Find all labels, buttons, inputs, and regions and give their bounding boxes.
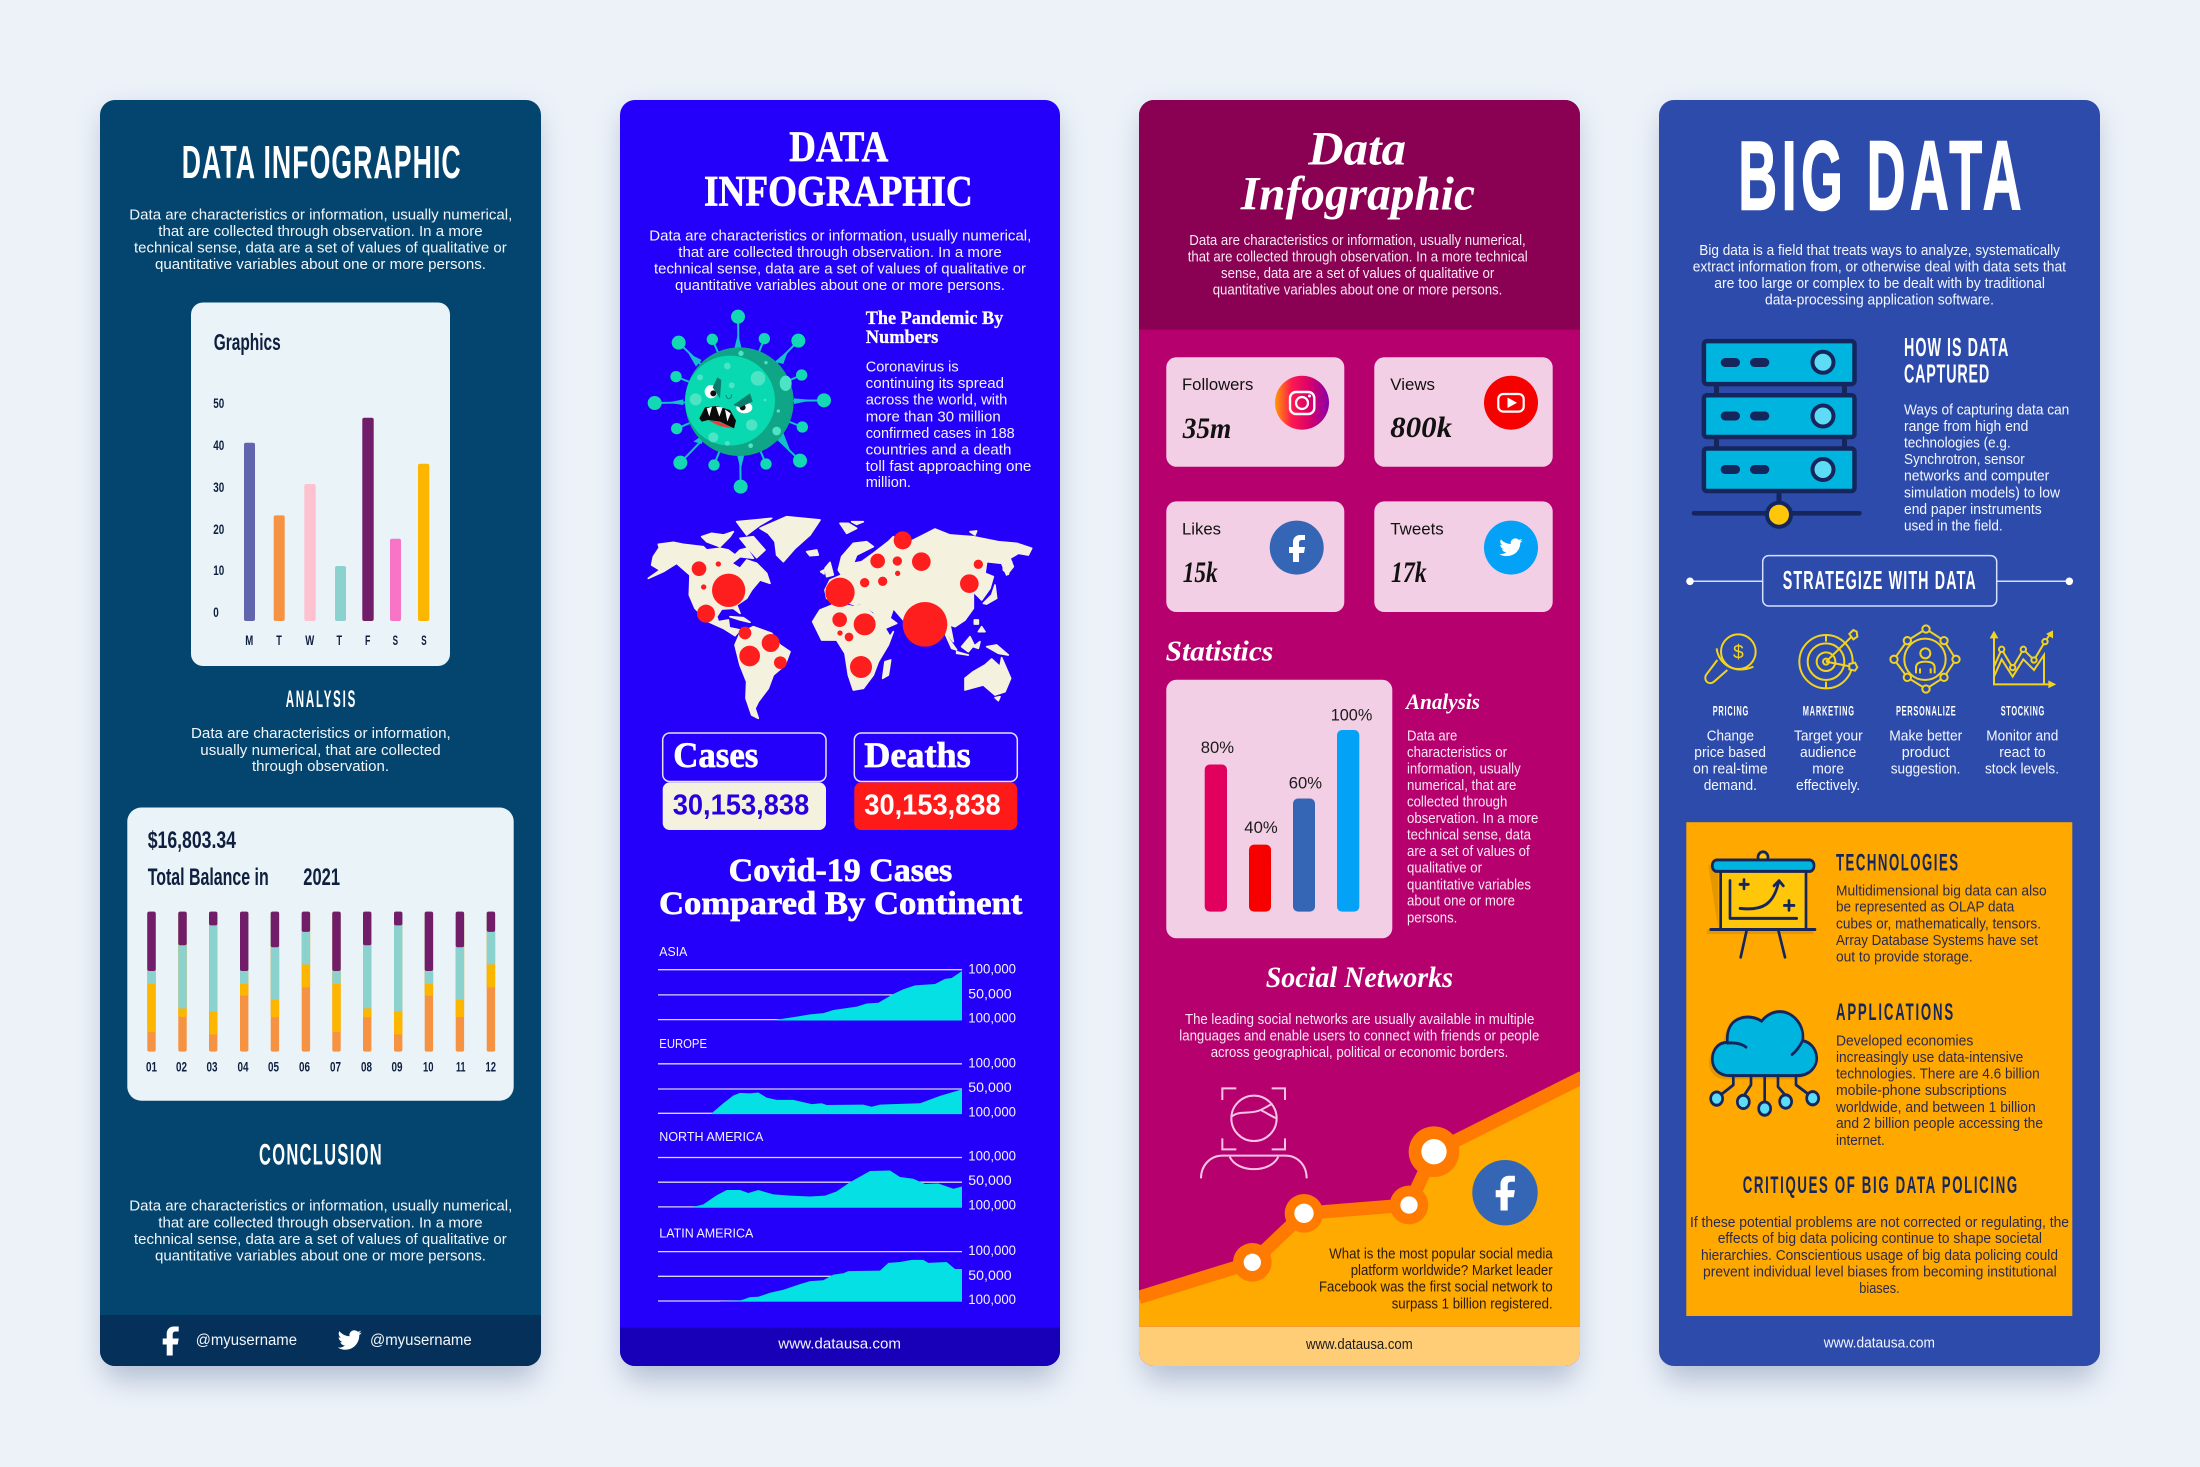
column: pricing text: PRICING bbox=[1713, 704, 1748, 719]
analysis text: characteristics or bbox=[1407, 745, 1507, 761]
callout text bbox=[1319, 1246, 1554, 1312]
column: pricing text: price based bbox=[1694, 745, 1766, 761]
card: total balance stacked bars: 09 bbox=[392, 1059, 403, 1075]
intro text: that are collected through observation. In a more bbox=[678, 244, 1002, 261]
callout text: surpass 1 billion registered. bbox=[1392, 1296, 1553, 1312]
social networks text: The leading social networks are usually available in multiple bbox=[1185, 1012, 1534, 1028]
footer bar bbox=[1139, 1327, 1580, 1366]
technologies text: out to provide storage. bbox=[1836, 949, 1973, 966]
icon: cloud network bbox=[1709, 1012, 1819, 1115]
card: graphics bar chart: S bbox=[393, 633, 398, 648]
card: views bbox=[1374, 357, 1553, 467]
conclusion text: technical sense, data are a set of values of qualitative or bbox=[134, 1231, 507, 1248]
card: tweets: 17k bbox=[1391, 556, 1427, 589]
card: graphics bar chart: Graphics bbox=[214, 329, 281, 355]
social networks text bbox=[1179, 1012, 1539, 1061]
card: percentage bar chart: 40% bbox=[1244, 818, 1278, 837]
conclusion text: quantitative variables about one or more persons. bbox=[155, 1248, 486, 1265]
analysis text: numerical, that are bbox=[1407, 778, 1516, 794]
analysis text: Data are characteristics or information, bbox=[191, 725, 451, 742]
intro text: Big data is a field that treats ways to analyze, systematically bbox=[1699, 243, 2061, 259]
card: total balance stacked bars: 11 bbox=[456, 1059, 466, 1075]
applications text: increasingly use data-intensive bbox=[1836, 1049, 2023, 1066]
pandemic text: continuing its spread bbox=[866, 375, 1004, 392]
icon: pricing bbox=[1705, 634, 1756, 683]
line chart with yellow area bbox=[1139, 1077, 1582, 1327]
card: percentage bar chart: 100% bbox=[1331, 705, 1372, 724]
card: total balance stacked bars: $16,803.34 bbox=[148, 827, 236, 854]
pandemic text: countries and a death bbox=[866, 442, 1011, 459]
area chart: continents: 100,000 bbox=[968, 1291, 1016, 1307]
card: followers: 35m bbox=[1182, 412, 1231, 445]
title: INFOGRAPHIC bbox=[704, 168, 973, 216]
column: marketing text: MARKETING bbox=[1803, 704, 1854, 719]
heading: how is data captured: CAPTURED bbox=[1904, 360, 1989, 389]
area chart: continents: NORTH AMERICA bbox=[659, 1129, 764, 1144]
critiques text: effects of big data policing continue to shape societal bbox=[1718, 1230, 2042, 1247]
area chart: continents: 100,000 bbox=[968, 1103, 1016, 1119]
card: graphics bar chart: F bbox=[365, 633, 370, 648]
heading: covid-19 cases compared by continent: Covid-19 Cases bbox=[729, 853, 952, 889]
technologies text: be represented as OLAP data bbox=[1836, 899, 2015, 916]
card: likes: 15k bbox=[1183, 556, 1218, 589]
card: likes: Likes bbox=[1182, 520, 1221, 538]
critiques text: biases. bbox=[1859, 1280, 1900, 1297]
intro text: that are collected through observation. In a more technical bbox=[1188, 249, 1528, 265]
applications text: internet. bbox=[1836, 1132, 1885, 1149]
applications text: mobile-phone subscriptions bbox=[1836, 1082, 2007, 1099]
analysis text bbox=[191, 725, 451, 775]
card: total balance stacked bars bbox=[127, 808, 514, 1101]
banner: strategize with data bbox=[1686, 556, 2073, 606]
area chart: continents: 100,000 bbox=[968, 1196, 1016, 1212]
area chart: continents bbox=[658, 944, 1016, 1307]
captured text bbox=[1904, 403, 2069, 534]
icon: personalize network bbox=[1890, 625, 1960, 693]
panel: big data blue bbox=[1659, 100, 2100, 1366]
analysis text: technical sense, data bbox=[1407, 828, 1532, 844]
footer bar: usernames bbox=[100, 1315, 541, 1366]
technologies text: Multidimensional big data can also bbox=[1836, 882, 2047, 899]
intro text: Data are characteristics or information, usually numerical, bbox=[129, 206, 512, 224]
stat: cases: Cases bbox=[673, 735, 758, 775]
applications text: technologies. There are 4.6 billion bbox=[1836, 1066, 2040, 1083]
intro text: extract information from, or otherwise deal with data sets that bbox=[1693, 259, 2066, 275]
technologies text: Array Database Systems have set bbox=[1836, 932, 2039, 949]
captured text: networks and computer bbox=[1904, 469, 2049, 485]
icon: pricing: $ bbox=[1733, 643, 1744, 664]
intro text: quantitative variables about one or more persons. bbox=[155, 256, 486, 273]
area chart: continents: 100,000 bbox=[968, 1148, 1016, 1164]
captured text: range from high end bbox=[1904, 419, 2028, 435]
intro text: are too large or complex to be dealt with by traditional bbox=[1714, 276, 2045, 292]
card: total balance stacked bars: 04 bbox=[238, 1059, 249, 1075]
card: total balance stacked bars: 06 bbox=[299, 1059, 310, 1075]
captured text: technologies (e.g. bbox=[1904, 436, 2011, 452]
column: personalize text: PERSONALIZE bbox=[1896, 704, 1956, 719]
area chart: continents: EUROPE bbox=[659, 1036, 707, 1051]
card: views: 800k bbox=[1390, 411, 1452, 444]
card: tweets: Tweets bbox=[1390, 520, 1444, 538]
heading: technologies: TECHNOLOGIES bbox=[1836, 849, 1958, 876]
column: marketing text: Target your bbox=[1794, 729, 1863, 745]
conclusion text bbox=[129, 1198, 512, 1265]
area chart: continents: 50,000 bbox=[968, 1172, 1012, 1188]
card: total balance stacked bars: 2021 bbox=[303, 864, 340, 891]
intro text: Data are characteristics or information, usually numerical, bbox=[1189, 233, 1526, 249]
card: graphics bar chart bbox=[191, 302, 450, 666]
icon: presentation board bbox=[1707, 852, 1815, 957]
card: graphics bar chart: 20 bbox=[213, 522, 224, 537]
stat: deaths bbox=[854, 733, 1017, 830]
analysis text: Data are bbox=[1407, 728, 1457, 744]
intro text bbox=[1188, 233, 1528, 298]
intro text: quantitative variables about one or more persons. bbox=[1213, 282, 1502, 298]
pandemic text: more than 30 million bbox=[866, 408, 1001, 425]
title bbox=[1240, 123, 1475, 221]
column: stocking text: STOCKING bbox=[2001, 704, 2044, 719]
stat: deaths: 30,153,838 bbox=[864, 790, 1001, 822]
conclusion text: that are collected through observation. In a more bbox=[158, 1214, 483, 1231]
heading: the pandemic by numbers: The Pandemic By bbox=[866, 308, 1004, 329]
intro text: data-processing application software. bbox=[1765, 292, 1994, 308]
column: personalize text bbox=[1889, 704, 1962, 778]
card: views: Views bbox=[1390, 375, 1435, 394]
icon: stocking chart bbox=[1991, 632, 2054, 687]
analysis text: quantitative variables bbox=[1407, 877, 1531, 893]
icon: facebook bbox=[1472, 1160, 1538, 1225]
social networks text: languages and enable users to connect with friends or people bbox=[1179, 1029, 1539, 1045]
card: followers: Followers bbox=[1182, 375, 1253, 394]
intro text: quantitative variables about one or more persons. bbox=[675, 277, 1005, 294]
footer bar: www.datausa.com bbox=[1305, 1337, 1413, 1353]
analysis text: usually numerical, that are collected bbox=[200, 742, 441, 759]
captured text: Synchrotron, sensor bbox=[1904, 452, 2025, 468]
card: total balance stacked bars: 05 bbox=[268, 1059, 279, 1075]
pandemic text: toll fast approaching one bbox=[866, 458, 1031, 475]
intro text: technical sense, data are a set of values of qualitative or bbox=[134, 240, 507, 256]
footer bar: usernames: @myusername bbox=[370, 1332, 472, 1349]
applications text: worldwide, and between 1 billion bbox=[1835, 1099, 2036, 1116]
captured text: Ways of capturing data can bbox=[1904, 403, 2069, 419]
heading: statistics: Statistics bbox=[1166, 637, 1273, 668]
captured text: end paper instruments bbox=[1904, 502, 2042, 518]
column: marketing text: audience bbox=[1800, 745, 1856, 761]
footer bar bbox=[620, 1328, 1060, 1366]
critiques text: prevent individual level biases from becoming institutional bbox=[1703, 1264, 2057, 1280]
title: Infographic bbox=[1240, 168, 1475, 221]
pandemic text: across the world, with bbox=[866, 392, 1007, 409]
area chart: continents: 100,000 bbox=[968, 1242, 1016, 1258]
critiques text: If these potential problems are not corrected or regulating, the bbox=[1690, 1214, 2069, 1231]
heading: critiques of big data policing: CRITIQUES OF BIG DATA POLICING bbox=[1743, 1172, 2017, 1199]
heading: analysis: Analysis bbox=[1404, 689, 1480, 714]
card: total balance stacked bars: 01 bbox=[146, 1059, 157, 1075]
analysis text: through observation. bbox=[252, 758, 389, 775]
area chart: continents: LATIN AMERICA bbox=[659, 1225, 754, 1240]
title: DATA INFOGRAPHIC bbox=[182, 136, 461, 188]
card: total balance stacked bars: 10 bbox=[423, 1059, 434, 1075]
orange box bbox=[1686, 822, 2072, 1316]
area chart: continents: 50,000 bbox=[968, 1267, 1012, 1283]
header band bbox=[1139, 100, 1580, 330]
heading: conclusion: CONCLUSION bbox=[259, 1139, 382, 1172]
area chart: continents: ASIA bbox=[659, 944, 688, 959]
analysis text: are a set of values of bbox=[1407, 844, 1531, 860]
intro text: technical sense, data are a set of values of qualitative or bbox=[654, 260, 1026, 278]
analysis text: information, usually bbox=[1407, 761, 1521, 777]
title: BIG DATA bbox=[1738, 120, 2022, 230]
card: total balance stacked bars: 07 bbox=[330, 1059, 341, 1075]
technologies text bbox=[1836, 882, 2047, 966]
panel: social magenta bbox=[1139, 100, 1582, 1366]
column: stocking text: react to bbox=[1999, 745, 2046, 761]
card: total balance stacked bars: 12 bbox=[486, 1059, 496, 1075]
heading: the pandemic by numbers: Numbers bbox=[866, 327, 938, 348]
banner: strategize with data: STRATEGIZE WITH DATA bbox=[1783, 567, 1976, 595]
card: graphics bar chart: W bbox=[305, 633, 314, 648]
analysis text: collected through bbox=[1407, 794, 1507, 810]
card: followers bbox=[1166, 357, 1344, 467]
heading: applications: APPLICATIONS bbox=[1836, 999, 1953, 1026]
column: pricing text bbox=[1693, 704, 1768, 794]
card: tweets bbox=[1374, 501, 1553, 612]
stat: cases bbox=[663, 733, 826, 830]
heading: covid-19 cases compared by continent bbox=[659, 853, 1022, 922]
card: graphics bar chart: 50 bbox=[213, 396, 224, 411]
heading: social networks: Social Networks bbox=[1266, 961, 1453, 994]
card: graphics bar chart: 30 bbox=[213, 480, 224, 495]
column: marketing text: effectively. bbox=[1796, 778, 1860, 794]
card: graphics bar chart: S bbox=[421, 633, 427, 648]
social networks text: across geographical, political or economic borders. bbox=[1211, 1045, 1508, 1061]
world map with case bubbles bbox=[648, 517, 1032, 718]
column: personalize text: product bbox=[1902, 745, 1950, 761]
column: pricing text: Change bbox=[1707, 729, 1754, 745]
applications text bbox=[1835, 1033, 2043, 1149]
icon: server stack bbox=[1692, 341, 1862, 527]
area chart: continents: 100,000 bbox=[968, 961, 1016, 977]
card: likes bbox=[1166, 501, 1344, 612]
icon: angry virus bbox=[648, 310, 831, 494]
column: marketing text bbox=[1794, 704, 1863, 794]
intro text bbox=[129, 206, 512, 273]
title: Data bbox=[1307, 123, 1406, 176]
card: percentage bar chart bbox=[1166, 680, 1392, 938]
heading: analysis: ANALYSIS bbox=[286, 685, 355, 712]
card: graphics bar chart: 10 bbox=[213, 563, 224, 578]
applications text: and 2 billion people accessing the bbox=[1836, 1115, 2043, 1132]
area chart: continents: 50,000 bbox=[968, 985, 1012, 1001]
card: graphics bar chart: M bbox=[245, 633, 253, 648]
captured text: simulation models) to low bbox=[1904, 485, 2060, 501]
card: graphics bar chart: T bbox=[336, 633, 343, 648]
column: personalize text: Make better bbox=[1889, 729, 1962, 745]
analysis text: persons. bbox=[1407, 910, 1457, 926]
pandemic text: million. bbox=[866, 474, 911, 491]
area chart: continents: 100,000 bbox=[968, 1054, 1016, 1070]
callout text: platform worldwide? Market leader bbox=[1351, 1263, 1553, 1279]
column: pricing text: on real-time bbox=[1693, 762, 1768, 778]
footer url: www.datausa.com bbox=[1823, 1336, 1935, 1352]
column: stocking text bbox=[1985, 704, 2059, 778]
column: personalize text: suggestion. bbox=[1891, 762, 1960, 778]
column: stocking text: stock levels. bbox=[1985, 762, 2059, 778]
card: graphics bar chart: 0 bbox=[213, 605, 219, 620]
critiques text: hierarchies. Conscientious usage of big data policing could bbox=[1701, 1247, 2058, 1264]
column: pricing text: demand. bbox=[1704, 778, 1757, 794]
card: total balance stacked bars: 08 bbox=[361, 1059, 372, 1075]
pandemic text bbox=[866, 358, 1031, 491]
footer bar: usernames: @myusername bbox=[196, 1332, 297, 1349]
heading: the pandemic by numbers bbox=[866, 308, 1004, 348]
heading: covid-19 cases compared by continent: Compared By Continent bbox=[659, 886, 1022, 922]
card: percentage bar chart: 60% bbox=[1289, 774, 1322, 793]
panel: data infographic teal bbox=[100, 100, 541, 1366]
column: stocking text: Monitor and bbox=[1986, 729, 2058, 745]
analysis text: observation. In a more bbox=[1407, 811, 1538, 827]
title: DATA bbox=[789, 124, 888, 171]
intro text: that are collected through observation. In a more bbox=[158, 223, 483, 240]
critiques text bbox=[1690, 1214, 2069, 1297]
captured text: used in the field. bbox=[1904, 518, 2003, 534]
card: total balance stacked bars: 03 bbox=[206, 1059, 218, 1075]
icon: person face scan bbox=[1201, 1088, 1307, 1178]
card: total balance stacked bars: Total Balance in bbox=[148, 864, 269, 891]
stat: deaths: Deaths bbox=[864, 735, 971, 775]
intro text bbox=[1693, 243, 2066, 308]
conclusion text: Data are characteristics or information, usually numerical, bbox=[129, 1198, 512, 1214]
intro text bbox=[649, 227, 1031, 294]
panel: covid blue bbox=[620, 100, 1060, 1366]
callout text: Facebook was the first social network to bbox=[1319, 1280, 1553, 1296]
card: total balance stacked bars: 02 bbox=[176, 1059, 187, 1075]
card: graphics bar chart: 40 bbox=[213, 438, 224, 453]
heading: how is data captured: HOW IS DATA bbox=[1904, 333, 2008, 362]
stat: cases: 30,153,838 bbox=[673, 790, 809, 822]
pandemic text: Coronavirus is bbox=[866, 358, 959, 376]
icon: marketing target bbox=[1799, 630, 1857, 688]
analysis text bbox=[1407, 728, 1538, 926]
pandemic text: confirmed cases in 188 bbox=[866, 425, 1015, 442]
technologies text: cubes or, mathematically, tensors. bbox=[1836, 915, 2041, 932]
heading: how is data captured bbox=[1904, 333, 2008, 389]
title bbox=[704, 124, 973, 216]
analysis text: about one or more bbox=[1407, 894, 1515, 910]
column: marketing text: more bbox=[1812, 762, 1844, 778]
card: graphics bar chart: T bbox=[276, 633, 282, 648]
card: percentage bar chart: 80% bbox=[1201, 738, 1234, 757]
area chart: continents: 100,000 bbox=[968, 1010, 1016, 1026]
intro text: Data are characteristics or information, usually numerical, bbox=[649, 227, 1031, 244]
area chart: continents: 50,000 bbox=[968, 1079, 1012, 1095]
applications text: Developed economies bbox=[1836, 1033, 1973, 1050]
intro text: sense, data are a set of values of qualitative or bbox=[1221, 266, 1494, 282]
analysis text: qualitative or bbox=[1407, 860, 1482, 876]
callout text: What is the most popular social media bbox=[1329, 1246, 1554, 1262]
footer bar: www.datausa.com bbox=[777, 1335, 901, 1352]
